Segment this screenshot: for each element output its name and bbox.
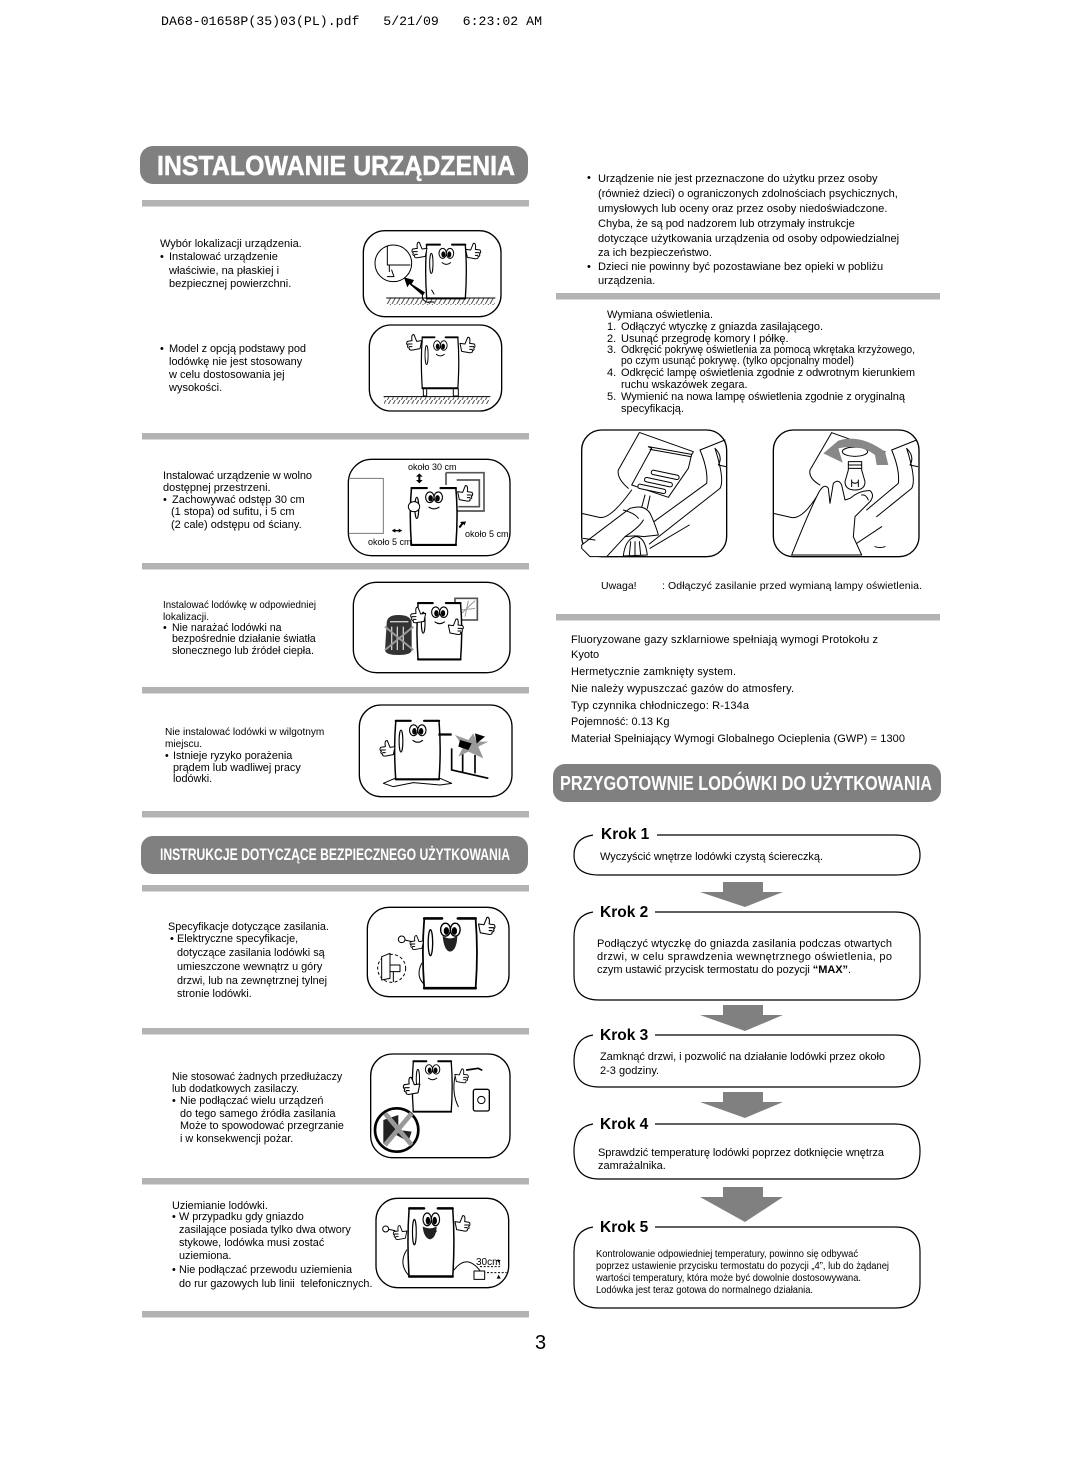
text: free space: (2 cale) odstępu od ściany. (171, 519, 302, 531)
text: no damp locations: prądem lub wadliwej pracy (173, 762, 301, 774)
text: lamp replacement steps: Wymiana oświetlenia. (607, 309, 713, 321)
step 2: Podłączyć wtyczkę do gniazda zasilania podczas otwartych (597, 938, 892, 950)
text: right column warnings: Urządzenie nie jest przeznaczone do użytku przez osoby (598, 173, 878, 185)
illustration: fridge on base (369, 325, 502, 411)
text: location choice: Wybór lokalizacji urządzenia. (160, 238, 302, 250)
text: right column warnings: dotyczące użytkowania urządzenia od osoby odpowiedzialnej (598, 233, 899, 245)
step 3: Krok 3 (600, 1027, 649, 1044)
text: right column warnings: Chyba, że są pod nadzorem lub otrzymały instrukcje (598, 218, 855, 230)
text: grounding (172, 1200, 372, 1290)
step 4: Krok 4 (600, 1116, 649, 1133)
section heading: safety instructions: INSTRUKCJE DOTYCZĄCE BEZPIECZNEGO UŻYTKOWANIA (160, 845, 510, 864)
illustration: removing lamp cover with screwdriver (582, 430, 727, 557)
text: power specification: dotyczące zasilania lodówki są (177, 947, 326, 959)
text: base option: lodówkę nie jest stosowany (169, 356, 303, 368)
text: avoid heat: bezpośrednie działanie światła (172, 633, 316, 645)
step 5: Krok 5 (600, 1219, 649, 1236)
step 1 (574, 826, 920, 875)
step 2 (574, 904, 920, 1000)
text: no extension cords: do tego samego źródła zasilania (180, 1108, 336, 1120)
text: lamp replacement steps: Odłączyć wtyczkę z gniazda zasilającego. (621, 321, 823, 333)
text: avoid heat: słonecznego lub źródeł ciepła. (172, 645, 314, 657)
text: right column warnings: • (587, 261, 591, 273)
text: no extension cords (172, 1071, 344, 1145)
illustration: fridge with plug (367, 907, 509, 997)
text: no extension cords: lub dodatkowych zasilaczy. (172, 1083, 299, 1095)
text: lamp replacement steps: Odkręcić pokrywę oświetlenia za pomocą wkrętaka krzyżowego, (621, 344, 915, 356)
section heading: safety instructions (141, 836, 528, 874)
text: greenhouse gas information (571, 634, 905, 745)
arrow 1 (700, 882, 783, 907)
text: no extension cords: • (172, 1095, 176, 1107)
step 5: wartości temperatury, która może być dowolnie dostosowywana. (595, 1272, 861, 1284)
text: grounding: Nie podłączać przewodu uziemienia (179, 1264, 353, 1276)
text: grounding: • (172, 1264, 176, 1276)
text: no damp locations: Istnieje ryzyko porażenia (173, 750, 293, 762)
text: lamp replacement steps: 5. (607, 391, 616, 403)
text: right column warnings: umysłowych lub oceny oraz przez osoby niedoświadczone. (598, 203, 887, 215)
text: base option: w celu dostosowania jej (168, 369, 285, 381)
text: free space (163, 470, 312, 531)
text: no extension cords: Może to spowodować przegrzanie (180, 1120, 344, 1132)
step 3: 2-3 godziny. (600, 1065, 659, 1077)
text: grounding: stykowe, lodówka musi zostać (179, 1237, 325, 1249)
illustration: clearance around fridge (348, 459, 510, 556)
illustration: overloaded socket (371, 1054, 510, 1158)
text: no damp locations: lodówki. (173, 773, 212, 785)
text: caution: : Odłączyć zasilanie przed wymianą lampy oświetlenia. (662, 580, 922, 592)
step 4 (574, 1116, 920, 1179)
text: lamp replacement steps: 4. (607, 367, 616, 379)
text: base option (160, 343, 306, 394)
illustration: fridge in damp place (359, 705, 512, 797)
text: lamp replacement steps: Usunąć przegrodę komory I półkę. (621, 333, 789, 345)
text: avoid heat: Nie narażać lodówki na (172, 622, 282, 634)
text: greenhouse gas information: Fluoryzowane gazy szklarniowe spełniają wymogi Protokołu z (571, 634, 878, 646)
step 3: Zamknąć drzwi, i pozwolić na działanie lodówki przez około (600, 1051, 885, 1063)
text: lamp replacement steps: 1. (607, 321, 616, 333)
text: power specification: Elektryczne specyfikacje, (177, 933, 298, 945)
illustration: clearance around fridge: około 5 cm (368, 537, 412, 547)
text: no extension cords: Nie stosować żadnych przedłużaczy (172, 1071, 343, 1083)
text: grounding: W przypadku gdy gniazdo (179, 1211, 304, 1223)
text: power specification: drzwi, lub na zewnętrznej tylnej (177, 975, 327, 987)
text: no damp locations (165, 727, 324, 785)
text: location choice: • (160, 251, 164, 263)
text: location choice (160, 238, 302, 290)
text: lamp replacement steps: 2. (607, 333, 616, 345)
step 5: poprzez ustawienie przycisku termostatu do pozycji „4”, lub do żądanej (596, 1260, 889, 1272)
illustration: fridge on flat floor (363, 231, 501, 317)
text: base option: • (160, 343, 164, 355)
page number: 3 (535, 1332, 546, 1354)
text: right column warnings: Dzieci nie powinny być pozostawiane bez opieki w pobliżu (598, 261, 883, 273)
step 5 (574, 1219, 920, 1308)
text: caution: Uwaga! (601, 580, 637, 592)
file header line: DA68-01658P(35)03(PL).pdf 5/21/09 6:23:02 AM (161, 14, 542, 29)
illustration: clearance around fridge: około 5 cm (465, 529, 509, 539)
step 2: Krok 2 (600, 904, 648, 921)
text: lamp replacement steps: ruchu wskazówek zegara. (621, 379, 748, 391)
text: grounding: Uziemianie lodówki. (172, 1200, 268, 1212)
arrow 4 (700, 1187, 783, 1222)
arrow 2 (700, 1005, 783, 1031)
text: greenhouse gas information: Nie należy wypuszczać gazów do atmosfery. (571, 683, 794, 695)
illustration: grounded fridge (376, 1198, 509, 1288)
text: lamp replacement steps: specyfikacją. (621, 403, 684, 415)
text: lamp replacement steps: Wymienić na nowa lampę oświetlenia zgodnie z oryginalną (621, 391, 906, 403)
illustration: fridge by heater and sun (353, 582, 510, 673)
arrow 3 (700, 1092, 783, 1118)
text: avoid heat: • (163, 622, 167, 634)
text: avoid heat: Instalować lodówkę w odpowiedniej (163, 600, 316, 611)
step 4: Sprawdzić temperaturę lodówki poprzez dotknięcie wnętrza (598, 1147, 885, 1159)
text: lamp replacement steps: po czym usunąć pokrywę. (tylko opcjonalny model) (621, 355, 854, 367)
step 5: Lodówka jest teraz gotowa do normalnego działania. (596, 1284, 813, 1296)
step 2: drzwi, w celu sprawdzenia wewnętrznego oświetlenia, po (597, 951, 892, 963)
text: power specification: • (170, 933, 174, 945)
text: avoid heat (163, 600, 316, 657)
text: power specification: Specyfikacje dotyczące zasilania. (168, 921, 329, 933)
illustration: clearance around fridge: około 30 cm (408, 462, 457, 472)
text: location choice: bezpiecznej powierzchni. (169, 278, 291, 290)
text: greenhouse gas information: Hermetycznie zamknięty system. (571, 666, 736, 678)
text: free space: (1 stopa) od sufitu, i 5 cm (171, 506, 294, 518)
step 1: Krok 1 (601, 826, 650, 843)
text: no extension cords: Nie podłączać wielu urządzeń (180, 1095, 323, 1107)
text: grounding: uziemiona. (179, 1250, 231, 1262)
text: location choice: Instalować urządzenie (169, 251, 278, 263)
text: no damp locations: Nie instalować lodówki w wilgotnym (165, 727, 324, 738)
text: greenhouse gas information: Materiał Spełniający Wymogi Globalnego Ocieplenia (GWP) = 1300 (571, 733, 905, 745)
text: no damp locations: miejscu. (165, 739, 202, 750)
text: power specification: stronie lodówki. (177, 988, 252, 1000)
text: greenhouse gas information: Kyoto (571, 649, 599, 661)
text: power specification (168, 921, 329, 1000)
text: greenhouse gas information: Pojemność: 0.13 Kg (571, 716, 669, 728)
text: lamp replacement steps: 3. (607, 344, 616, 356)
text: lamp replacement steps (607, 309, 915, 415)
text: avoid heat: lokalizacji. (163, 612, 209, 623)
text: grounding: zasilające posiada tylko dwa otwory (179, 1224, 351, 1236)
section heading: preparing fridge: PRZYGOTOWNIE LODÓWKI DO UŻYTKOWANIA (560, 771, 932, 795)
text: right column warnings: urządzenia. (598, 275, 655, 287)
illustration: grounded fridge: 30cm (476, 1257, 500, 1268)
text: location choice: właściwie, na płaskiej i (168, 265, 279, 277)
title: Instalowanie urządzenia: INSTALOWANIE URZĄDZENIA (157, 150, 515, 181)
text: no damp locations: • (165, 750, 169, 762)
text: free space: dostępnej przestrzeni. (163, 482, 271, 494)
text: free space: • (163, 494, 167, 506)
text: grounding: • (172, 1211, 176, 1223)
text: power specification: umieszczone wewnątrz u góry (177, 961, 323, 973)
text: right column warnings: • (587, 172, 591, 184)
step 4: zamrażalnika. (598, 1160, 666, 1172)
text: no extension cords: i w konsekwencji pożar. (180, 1133, 293, 1145)
text: greenhouse gas information: Typ czynnika chłodniczego: R-134a (571, 700, 750, 712)
text: right column warnings (587, 172, 899, 287)
text: free space: Zachowywać odstęp 30 cm (172, 494, 305, 506)
text: base option: Model z opcją podstawy pod (169, 343, 306, 355)
illustration: unscrewing lamp by hand (773, 430, 919, 557)
text: right column warnings: za ich bezpieczeństwo. (598, 247, 712, 259)
text: lamp replacement steps: Odkręcić lampę oświetlenia zgodnie z odwrotnym kierunkiem (621, 367, 915, 379)
text: grounding: do rur gazowych lub linii telefonicznych. (179, 1278, 372, 1290)
step 1: Wyczyścić wnętrze lodówki czystą ściereczką. (600, 851, 823, 863)
text: base option: wysokości. (168, 382, 222, 394)
text: right column warnings: (również dzieci) o ograniczonych zdolnościach psychicznych, (598, 188, 898, 200)
step 2: czym ustawić przycisk termostatu do pozycji “MAX”. (597, 964, 851, 976)
step 5: Kontrolowanie odpowiedniej temperatury, powinno się odbywać (596, 1248, 858, 1260)
text: free space: Instalować urządzenie w wolno (163, 470, 312, 482)
section heading: preparing fridge (553, 764, 941, 802)
step 3 (574, 1027, 920, 1087)
